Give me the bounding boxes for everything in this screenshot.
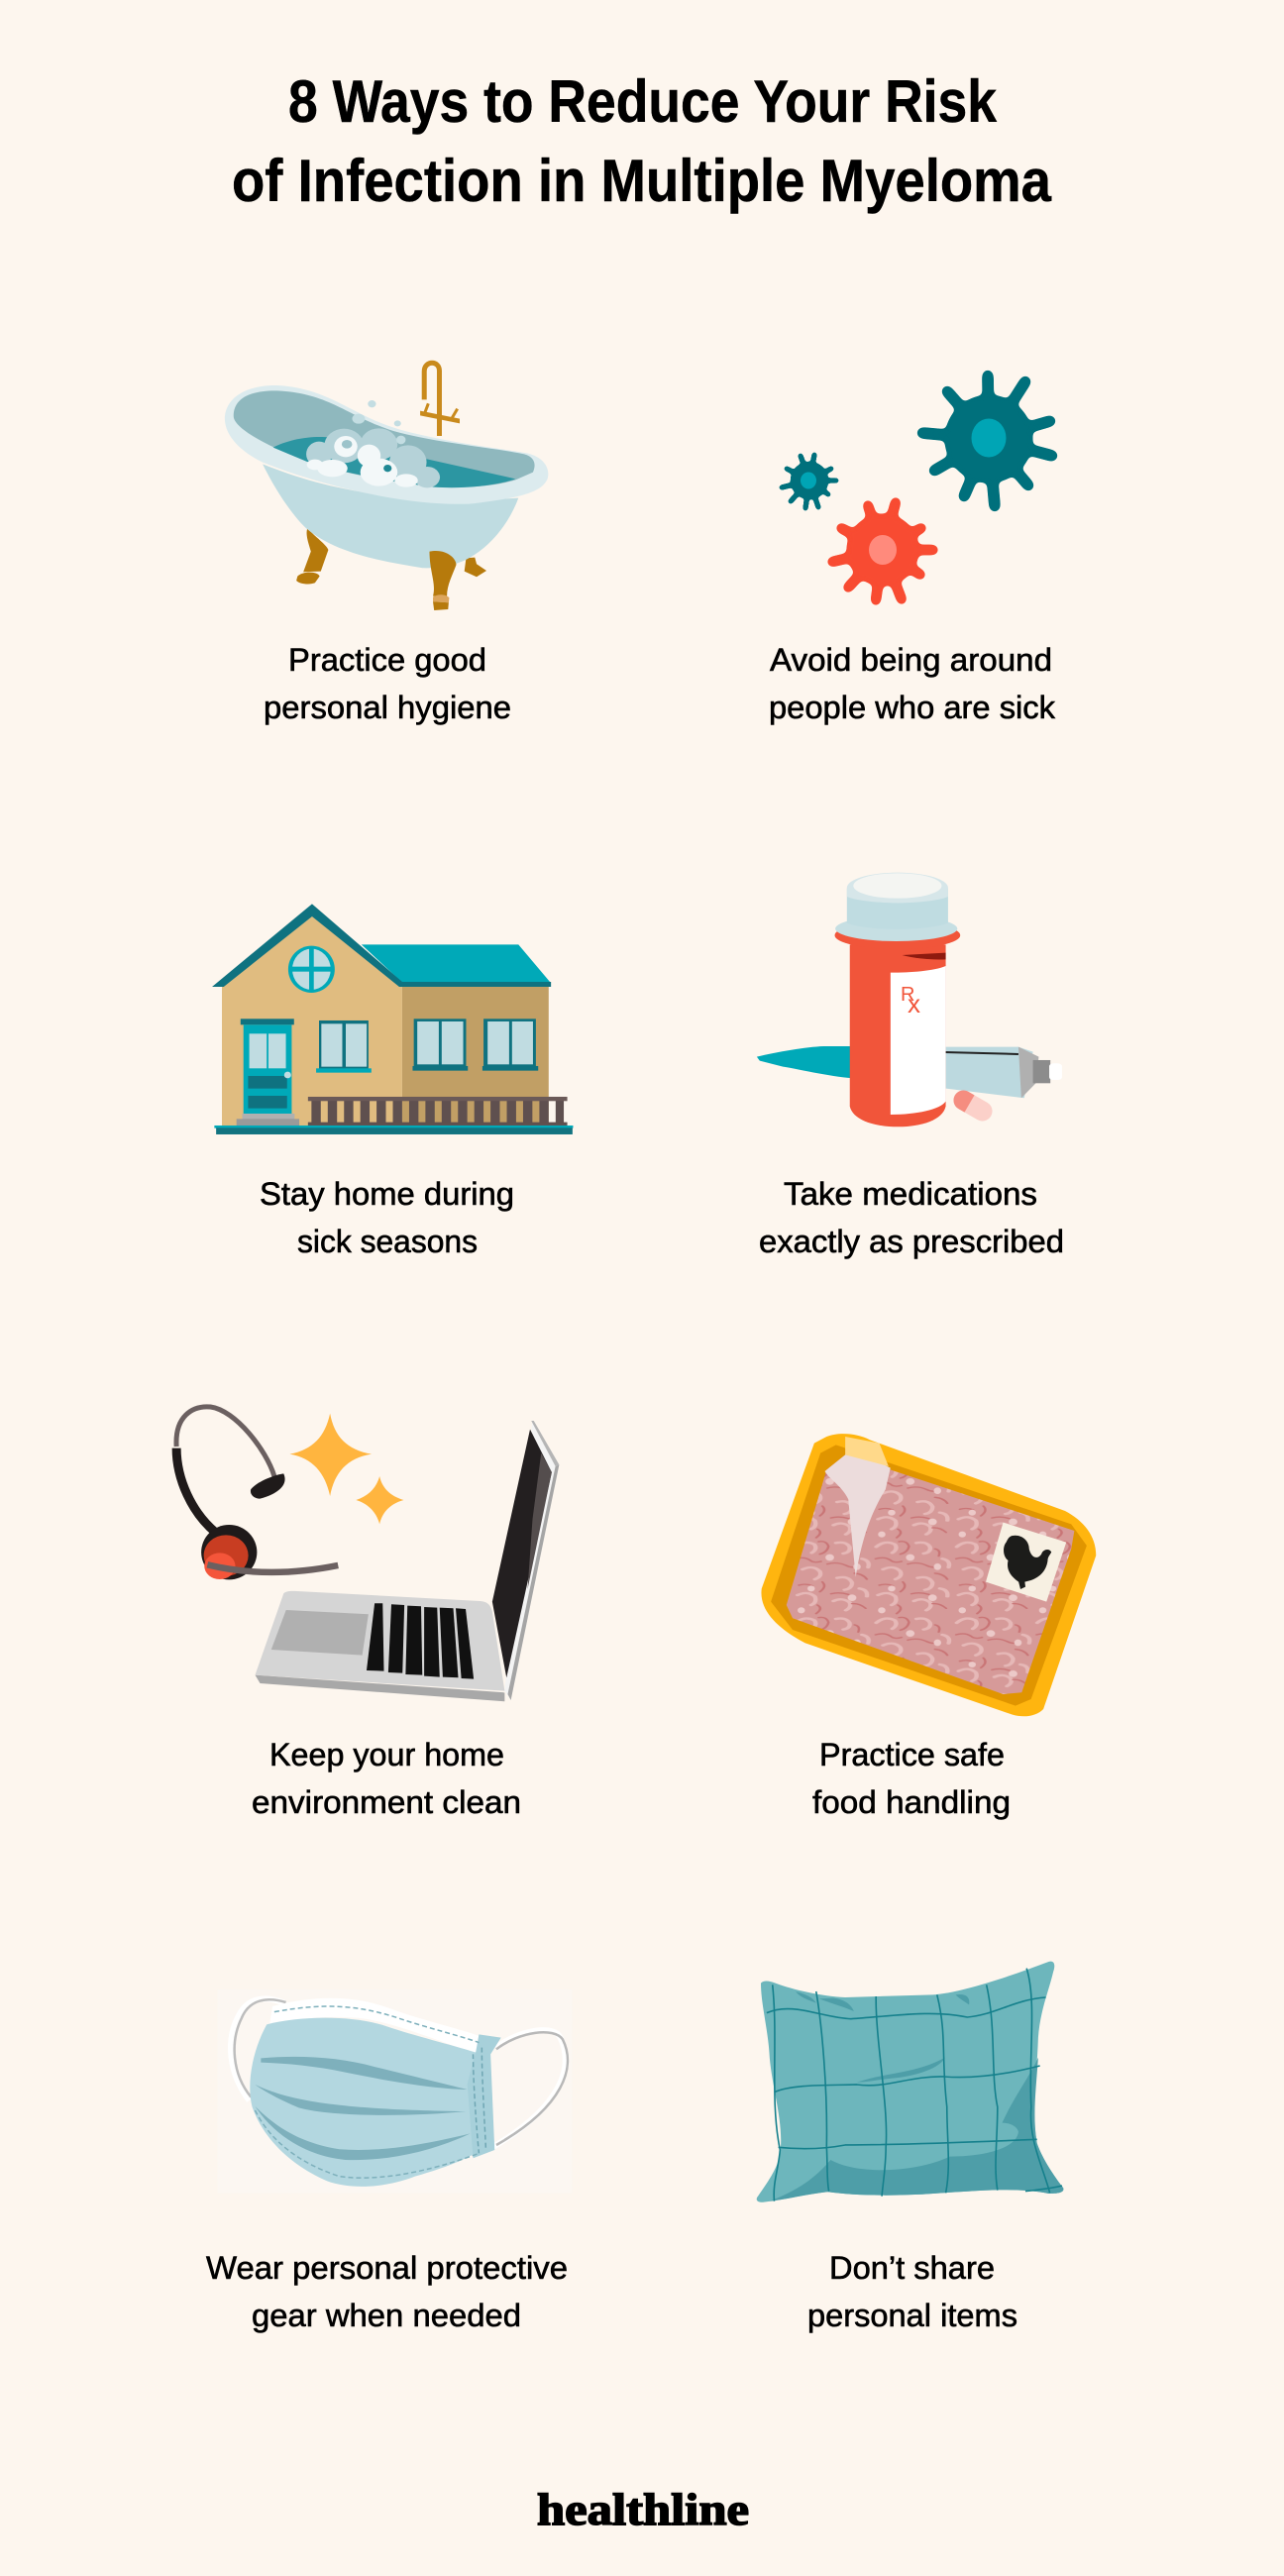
germ: small teal [782,455,836,508]
caption: protective gear [206,2250,568,2333]
sparkles [289,1414,404,1524]
caption: hygiene: personal hygiene [264,690,511,725]
germ: large teal [922,376,1052,506]
caption: protective gear: Wear personal protective [206,2250,568,2286]
caption: stay home [260,1176,514,1259]
turkey silhouette [1004,1536,1051,1589]
caption: avoid sick people: people who are sick [769,690,1056,725]
icon: ground turkey tray [761,1434,1096,1716]
laptop [256,1420,559,1701]
icon: surgical mask [217,1989,572,2193]
caption: medications: exactly as prescribed [759,1224,1064,1259]
icon: house [212,904,573,1134]
caption: food handling: food handling [812,1784,1011,1820]
title: 8 Ways to Reduce Your Risk [288,68,998,135]
rx symbol: R [901,984,914,1006]
title [232,68,1052,214]
icon: germs [782,376,1052,600]
caption: medications [759,1176,1064,1259]
caption: stay home: sick seasons [297,1224,478,1259]
caption: personal items [807,2250,1017,2333]
icon: bathtub [225,363,548,610]
caption: personal items: Don’t share [829,2250,995,2286]
title: of Infection in Multiple Myeloma [232,148,1052,214]
caption: hygiene [264,642,511,725]
headset [176,1407,338,1579]
germ: red [832,502,933,600]
caption: hygiene: Practice good [288,642,486,678]
caption: food handling: Practice safe [819,1737,1005,1772]
caption: avoid sick people [769,642,1056,725]
caption: avoid sick people: Avoid being around [770,642,1052,678]
logo: healthline: healthline [537,2484,749,2534]
pill [950,1087,996,1125]
caption: personal items: personal items [807,2298,1017,2333]
icon: medication bottle and tube [757,873,1062,1127]
caption: protective gear: gear when needed [252,2298,521,2333]
caption: medications: Take medications [784,1176,1037,1212]
rx symbol [901,984,920,1019]
caption: stay home: Stay home during [260,1176,514,1212]
caption: clean home: Keep your home [269,1737,504,1772]
rx symbol: x [908,989,920,1019]
caption: clean home [252,1737,521,1820]
caption: clean home: environment clean [252,1784,521,1820]
caption: food handling [812,1737,1011,1820]
icon: headset, sparkles and laptop [176,1407,559,1701]
icon: pillow [757,1962,1063,2202]
